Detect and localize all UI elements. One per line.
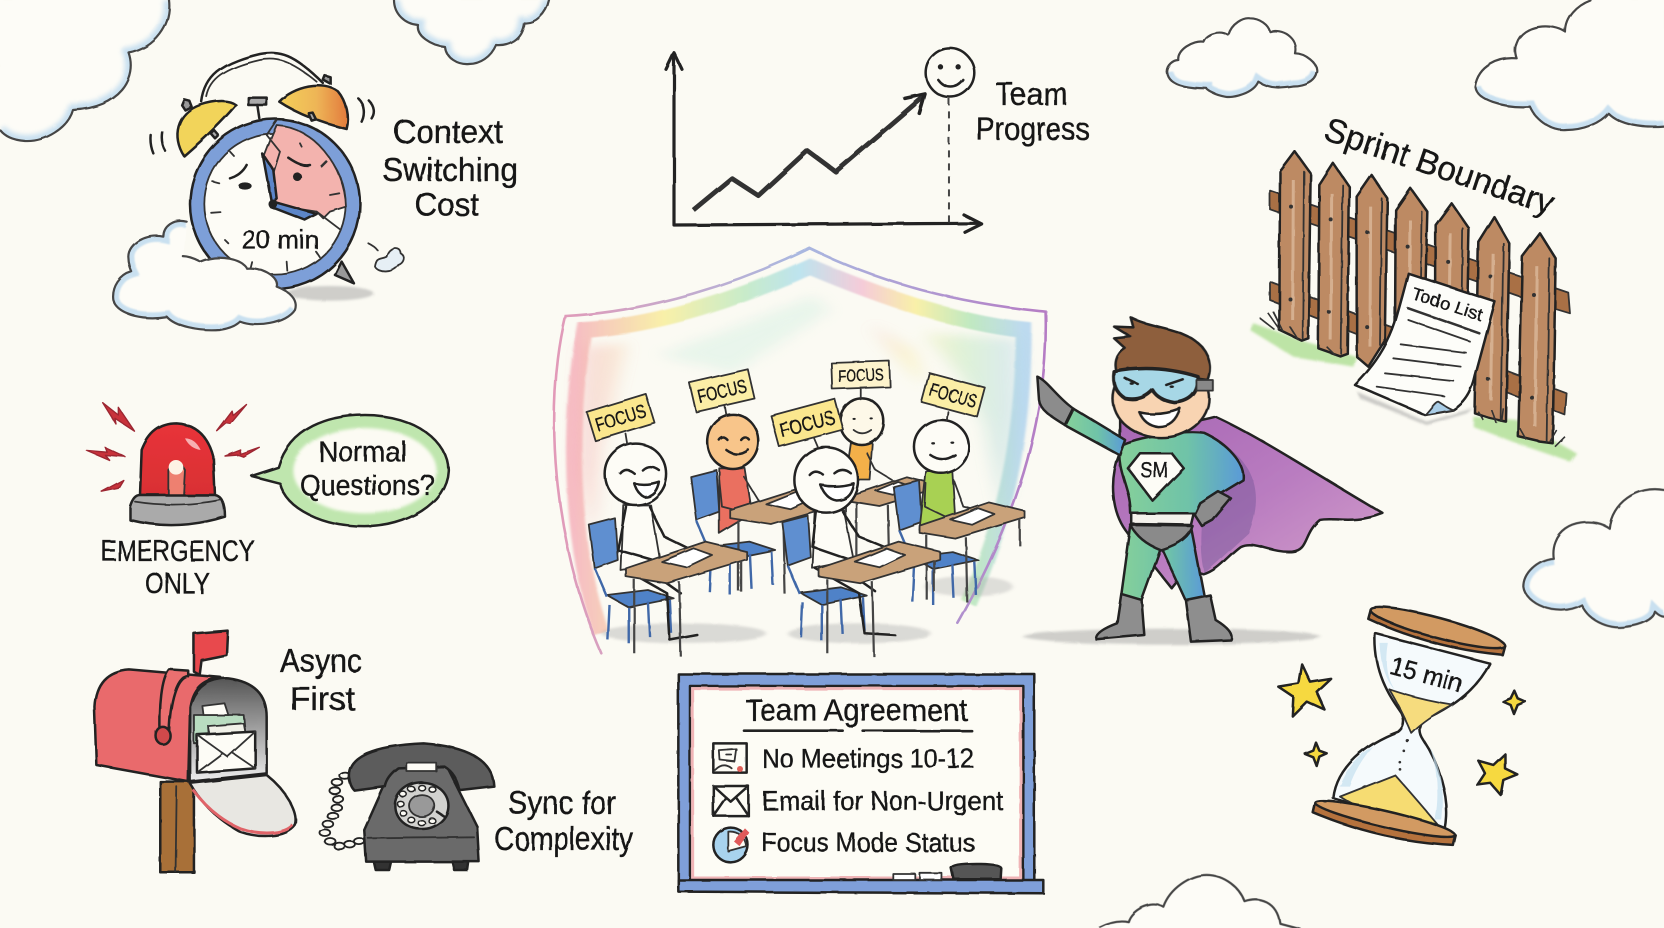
label: context switching cost	[382, 113, 518, 223]
label: context switching cost: Context	[393, 113, 503, 150]
icon: rotary telephone	[319, 743, 494, 870]
cloud: top middle	[394, 0, 549, 64]
student: orange: FOCUS	[696, 376, 749, 408]
student: front left	[586, 394, 747, 657]
raised arm and glove	[1065, 408, 1125, 455]
cloud: top right small	[1167, 18, 1317, 97]
student: front centre	[771, 399, 940, 657]
lower arm and glove	[1195, 492, 1231, 526]
chalk and eraser	[893, 864, 1001, 880]
label: sync for complexity: Complexity	[494, 820, 633, 857]
speech bubble: Normal	[318, 437, 407, 469]
todo list paper	[1355, 273, 1495, 415]
label: team progress	[976, 76, 1090, 147]
student: front centre: FOCUS	[778, 407, 837, 442]
cloud: right middle	[1523, 489, 1664, 627]
cloud: bottom	[1100, 875, 1300, 928]
label: sync for complexity	[494, 784, 633, 857]
cloud: top right large	[1475, 0, 1664, 130]
central scene: shield, students, superhero	[554, 248, 1383, 657]
label: context switching cost: Cost	[415, 186, 479, 223]
student: green: FOCUS	[927, 380, 979, 413]
puff of smoke	[375, 248, 404, 271]
label: team progress: Progress	[976, 111, 1090, 147]
label: emergency only: ONLY	[145, 567, 210, 600]
label: sync for complexity: Sync for	[508, 784, 616, 821]
label: emergency only: EMERGENCY	[101, 535, 255, 568]
shield rainbow	[554, 248, 1046, 653]
student: front left: FOCUS	[593, 401, 649, 436]
fence pickets	[1279, 152, 1556, 443]
label: async first: Async	[280, 642, 362, 679]
torso	[1119, 432, 1243, 513]
panel: team agreement whiteboard	[678, 674, 1043, 893]
cloud: in front of clock	[113, 221, 296, 330]
item: focus mode	[713, 828, 975, 862]
heading: team agreement: Team Agreement	[745, 694, 968, 728]
label: async first	[280, 642, 362, 717]
sand	[1389, 689, 1453, 733]
coiled cord	[319, 773, 365, 849]
student: green	[894, 373, 1025, 605]
legs and boots	[1121, 527, 1205, 600]
icon: fence with todo list	[1250, 152, 1577, 462]
cloud: top left	[0, 0, 169, 141]
icon: red mailbox	[94, 631, 296, 872]
label: sprint boundary: Sprint Boundary	[1319, 111, 1559, 223]
clock cracked pink face	[263, 125, 346, 218]
chest emblem	[1128, 453, 1184, 501]
smiley face	[926, 48, 974, 97]
student: back centre	[831, 361, 935, 557]
student: orange	[689, 369, 851, 595]
item: focus mode: Focus Mode Status	[762, 828, 975, 858]
icon: broken alarm clock	[113, 53, 404, 330]
clock face label: 20 min	[242, 224, 319, 254]
belt and shorts	[1132, 513, 1194, 525]
icon: hourglass with stars	[1278, 600, 1525, 851]
label: emergency only	[101, 535, 255, 600]
item: email: Email for Non-Urgent	[762, 786, 1004, 816]
goggles	[1114, 368, 1198, 403]
stars	[1278, 664, 1525, 795]
chest emblem: SM	[1140, 457, 1168, 482]
label: context switching cost: Switching	[382, 151, 518, 188]
icon: emergency siren	[86, 403, 448, 600]
speech bubble	[252, 415, 448, 527]
cape	[1113, 417, 1383, 588]
hero head	[1113, 359, 1209, 438]
grass blades	[1260, 312, 1565, 447]
superhero scrum master	[1024, 317, 1383, 645]
label: team progress: Team	[995, 76, 1068, 112]
bottom wooden cap	[1312, 795, 1457, 851]
todo list paper: Todo List	[1409, 283, 1485, 325]
envelope in mailbox	[197, 732, 255, 773]
student: back centre: FOCUS	[837, 365, 884, 386]
item: no meetings: No Meetings 10-12	[762, 743, 974, 773]
label: async first: First	[290, 680, 355, 717]
top wooden cap	[1367, 600, 1507, 661]
speech bubble: Questions?	[300, 470, 435, 502]
chart: team progress	[666, 48, 982, 232]
icon: hourglass with stars: 15 min	[1387, 650, 1466, 698]
